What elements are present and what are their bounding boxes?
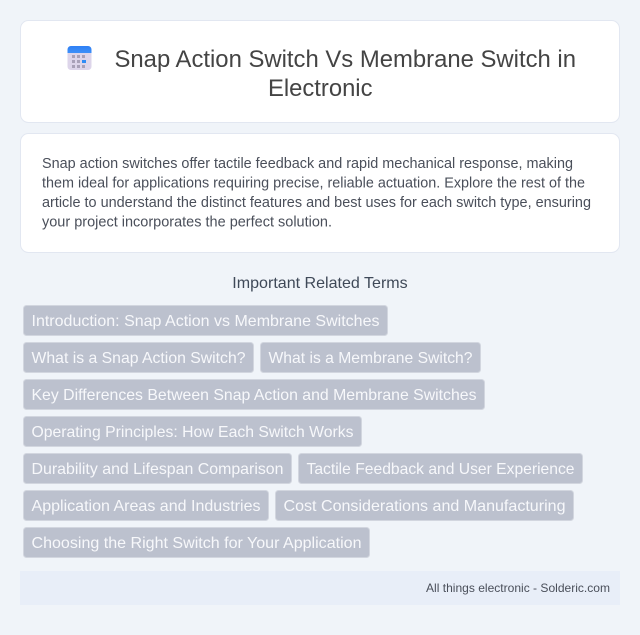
title: Snap Action Switch Vs Membrane Switch in [114,46,576,73]
icon: calendar [68,46,92,70]
title [114,46,576,102]
tag: operating principles [24,416,362,446]
heading: important related terms: Important Related Terms [232,275,408,292]
tag: introduction: Introduction: Snap Action vs Membrane Switches [32,313,380,330]
panel: title card [20,20,620,122]
tag: durability: Durability and Lifespan Comparison [32,461,284,478]
tag: tactile feedback [298,454,582,484]
tag list [24,306,582,558]
tag: application areas [24,490,268,520]
panel: introduction text: them ideal for applications requiring precise, reliable actuation. Explore the rest of the [42,176,585,192]
title: Electronic [268,75,372,102]
footer [20,571,620,605]
tag: cost considerations [276,490,574,520]
tag: choosing the right switch: Choosing the Right Switch for Your Application [32,535,362,552]
tag: durability [24,454,292,484]
tag: what is a membrane switch [260,342,480,372]
tag: tactile feedback: Tactile Feedback and User Experience [306,461,575,478]
panel: introduction text [20,134,620,252]
tag: introduction [24,306,388,336]
tag: what is a snap action switch: What is a Snap Action Switch? [32,350,246,367]
tag: key differences [24,380,484,410]
footer: All things electronic - Solderic.com [426,581,610,595]
panel: introduction text: Snap action switches offer tactile feedback and rapid mechanical response, making [42,156,573,172]
panel: introduction text: article to understand the distinct features and best uses for each switch type, ensuring [42,195,591,211]
tag: key differences: Key Differences Between Snap Action and Membrane Switches [32,387,476,404]
panel: introduction text: your project incorporates the perfect solution. [42,214,332,230]
tag: operating principles: Operating Principles: How Each Switch Works [32,424,354,441]
tag: cost considerations: Cost Considerations and Manufacturing [284,498,566,515]
tag: choosing the right switch [24,528,370,558]
tag: what is a snap action switch [24,342,254,372]
tag: what is a membrane switch: What is a Membrane Switch? [268,350,473,367]
tag: application areas: Application Areas and Industries [32,498,260,515]
